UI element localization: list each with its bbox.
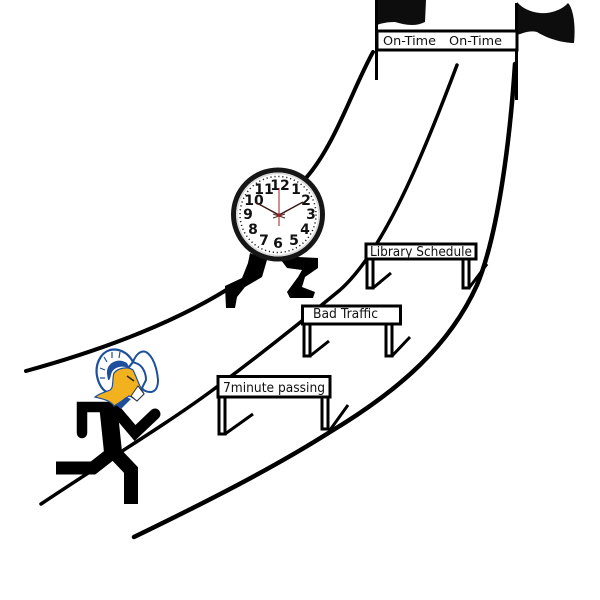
right flag: [517, 2, 575, 43]
clock numerals: 1: [291, 182, 301, 198]
clock numerals: 9: [243, 207, 253, 223]
label: Library Schedule: [370, 245, 472, 260]
ram beard: [116, 397, 131, 409]
clock numerals: 3: [306, 207, 316, 223]
banner label left: On-Time: [383, 34, 436, 48]
clock numerals: 5: [289, 233, 299, 249]
clock face: [234, 170, 322, 259]
clock numerals: 4: [300, 222, 310, 238]
clock numerals: 7: [259, 233, 269, 249]
label: 7minute passing: [223, 381, 325, 396]
hurdle: bad traffic: [302, 306, 410, 356]
left pole: [375, 0, 378, 80]
outer horn right: [133, 351, 158, 392]
clock left leg: [225, 253, 267, 308]
clock numerals: 6: [273, 236, 283, 252]
clock numerals: 12: [270, 178, 290, 194]
ram face: [95, 368, 144, 406]
ram mascot head: [95, 350, 158, 409]
clock numerals: [243, 178, 316, 252]
clock right leg: [278, 256, 318, 298]
ram muzzle: [131, 386, 144, 401]
hurdle: library schedule: [366, 244, 487, 288]
track lane lines: [26, 52, 515, 537]
stick figure runner: [56, 404, 155, 504]
left flag: [377, 0, 426, 25]
running clock character: [225, 170, 322, 308]
main horn: [97, 350, 133, 394]
clock numerals: 11: [254, 182, 274, 198]
horn ridges: [100, 352, 120, 378]
hurdle: 7 minute passing: [218, 376, 348, 434]
right pole: [515, 3, 518, 100]
clock numerals: 2: [301, 193, 311, 209]
banner box: [377, 31, 517, 50]
horn inner curl: [107, 361, 130, 380]
ram eye: [127, 376, 134, 381]
finish line banner: [375, 0, 575, 100]
clock hands: [255, 202, 303, 215]
clock numerals: 10: [244, 193, 264, 209]
banner label right: On-Time: [449, 34, 502, 48]
clock numerals: 8: [248, 222, 258, 238]
label: Bad Traffic: [313, 307, 378, 322]
